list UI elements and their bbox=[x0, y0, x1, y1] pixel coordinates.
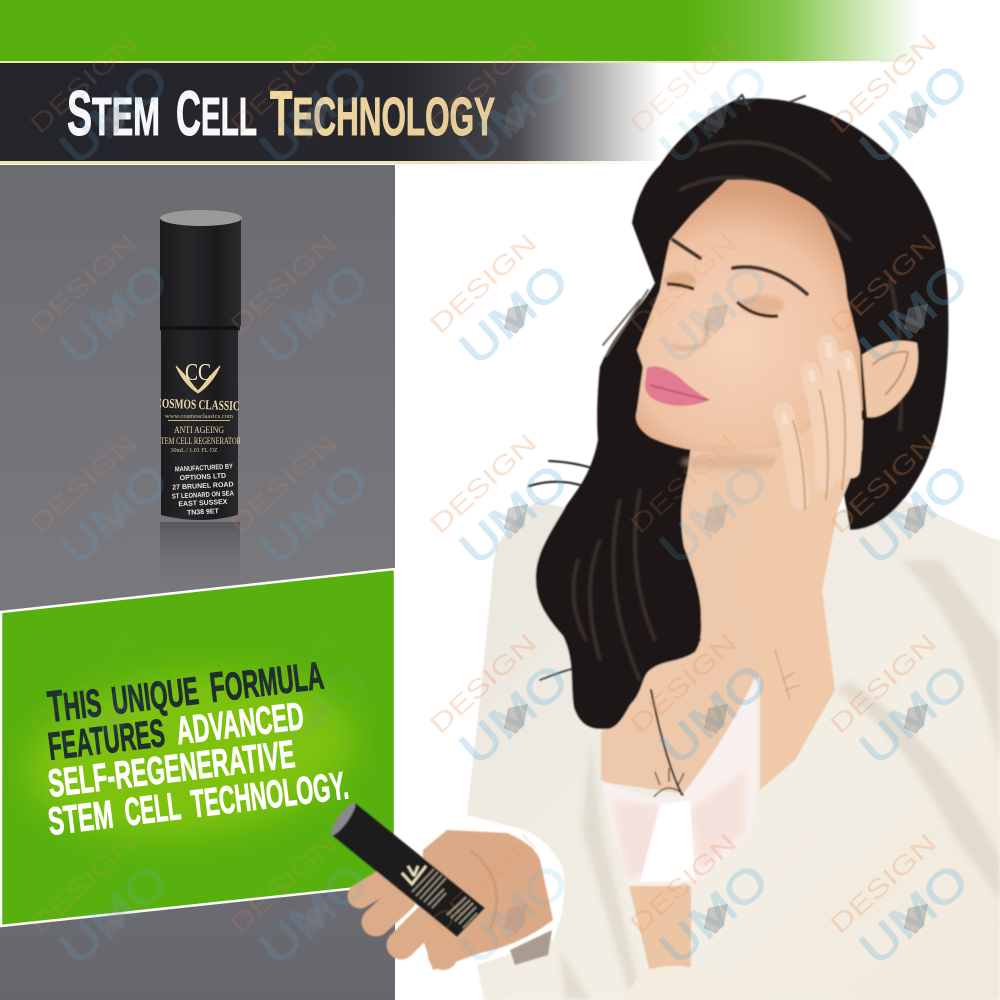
watermarks: UMO bbox=[849, 853, 978, 975]
watermarks: UMO bbox=[49, 853, 178, 975]
callout text: FORMULA bbox=[207, 651, 326, 711]
watermarks: DESIGN bbox=[424, 27, 542, 139]
watermarks: DESIGN bbox=[424, 227, 542, 339]
bottle label text: 27 BRUNEL ROAD bbox=[172, 481, 234, 492]
callout text: UNIQUE bbox=[109, 670, 201, 723]
robe lapel and tie bbox=[625, 966, 735, 1000]
watermarks: DESIGN bbox=[624, 627, 742, 739]
watermarks: UMO bbox=[649, 853, 778, 975]
title text bbox=[67, 79, 495, 149]
watermarks: UMO bbox=[49, 453, 178, 575]
white bra bbox=[601, 676, 756, 886]
face bbox=[636, 180, 863, 453]
bottle label text: MANUFACTURED BY bbox=[175, 463, 233, 474]
watermarks: DESIGN bbox=[624, 227, 742, 339]
watermarks: DESIGN bbox=[424, 627, 542, 739]
bottle label text: ANTI AGEING bbox=[174, 426, 224, 436]
watermarks: DESIGN bbox=[24, 427, 142, 539]
watermarks: UMO bbox=[649, 253, 778, 375]
callout text bbox=[45, 650, 351, 844]
watermarks: UMO bbox=[49, 653, 178, 775]
bottle label text: STEM CELL REGENERATOR bbox=[157, 437, 241, 447]
held product bottle bbox=[327, 800, 485, 937]
watermarks: DESIGN bbox=[824, 627, 942, 739]
held bottle logo bbox=[402, 866, 426, 884]
bottle label text: ST LEONARD ON SEA bbox=[172, 490, 234, 501]
product bottle upright bbox=[160, 210, 242, 558]
eyebrows bbox=[673, 240, 700, 258]
neck and chest bbox=[601, 440, 795, 795]
watermarks: DESIGN bbox=[824, 27, 942, 139]
watermarks: DESIGN bbox=[224, 27, 342, 139]
chest tattoo bbox=[654, 768, 684, 797]
watermarks: DESIGN bbox=[224, 227, 342, 339]
bottle label text: TN38 9ET bbox=[187, 508, 220, 517]
callout text: CELL bbox=[122, 785, 183, 835]
grey left panel bbox=[0, 165, 395, 1000]
watermarks: DESIGN bbox=[424, 427, 542, 539]
watermarks: UMO bbox=[449, 653, 578, 775]
watermarks: DESIGN bbox=[824, 227, 942, 339]
watermarks: DESIGN bbox=[24, 27, 142, 139]
watermarks: DESIGN bbox=[224, 627, 342, 739]
watermarks: UMO bbox=[649, 453, 778, 575]
callout text: ADVANCED bbox=[174, 695, 306, 753]
title text: CELL bbox=[176, 79, 257, 149]
callout text: THIS bbox=[45, 677, 104, 732]
callout text: SELF-REGENERATIVE bbox=[46, 733, 297, 806]
watermarks: DESIGN bbox=[824, 827, 942, 939]
raised hand bbox=[746, 343, 863, 590]
nose bbox=[672, 320, 707, 348]
green callout panel bbox=[1, 569, 395, 926]
forearm bbox=[746, 500, 836, 790]
ear bbox=[862, 341, 918, 417]
watermarks: UMO bbox=[849, 453, 978, 575]
under-chin shadow bbox=[680, 454, 790, 470]
watermarks: UMO bbox=[449, 453, 578, 575]
lips bbox=[645, 366, 710, 406]
watermarks: UMO bbox=[649, 653, 778, 775]
watermarks: UMO bbox=[449, 253, 578, 375]
watermarks: UMO bbox=[249, 853, 378, 975]
bottle label text: www.cosmosclassics.com bbox=[165, 414, 233, 420]
bottle logo bbox=[176, 360, 220, 393]
callout text: TECHNOLOGY. bbox=[189, 764, 351, 826]
watermarks: DESIGN bbox=[224, 827, 342, 939]
watermarks: UMO bbox=[449, 853, 578, 975]
title banner bbox=[0, 61, 880, 164]
watermarks: UMO bbox=[249, 653, 378, 775]
top green band bbox=[0, 0, 1000, 62]
eyes bbox=[664, 272, 696, 288]
watermarks: DESIGN bbox=[824, 427, 942, 539]
watermarks: UMO bbox=[49, 53, 178, 175]
watermarks: DESIGN bbox=[624, 827, 742, 939]
watermarks: UMO bbox=[49, 253, 178, 375]
watermarks: UMO bbox=[849, 253, 978, 375]
bottle label text bbox=[160, 398, 240, 515]
watermarks: DESIGN bbox=[224, 427, 342, 539]
woman portrait bbox=[467, 95, 1000, 1000]
title text: STEM bbox=[67, 79, 160, 149]
watermarks: UMO bbox=[849, 53, 978, 175]
watermarks: UMO bbox=[249, 53, 378, 175]
watermarks: UMO bbox=[649, 53, 778, 175]
watermarks: DESIGN bbox=[624, 27, 742, 139]
back hair bbox=[536, 98, 948, 729]
watermarks: UMO bbox=[449, 53, 578, 175]
held bottle label lines bbox=[412, 869, 477, 928]
title text: TECHNOLOGY bbox=[270, 79, 495, 149]
callout text: STEM bbox=[46, 793, 116, 844]
callout text: FEATURES bbox=[46, 712, 167, 769]
bottle label text: 30mL / 1.01 FL OZ bbox=[170, 448, 218, 454]
bottle logo: CC bbox=[185, 360, 211, 386]
watermarks: DESIGN bbox=[24, 227, 142, 339]
watermarks: UMO bbox=[249, 253, 378, 375]
hair strands bbox=[529, 95, 901, 795]
watermarks: DESIGN bbox=[24, 827, 142, 939]
holding hand bbox=[327, 800, 553, 970]
lower chest skin bbox=[629, 886, 691, 972]
watermarks: DESIGN bbox=[424, 827, 542, 939]
bottle label text: EAST SUSSEX bbox=[178, 499, 228, 508]
bottle label text: COSMOS CLASSICS bbox=[155, 395, 245, 414]
bottle label text: OPTIONS LTD bbox=[179, 473, 226, 482]
watermarks: DESIGN bbox=[624, 427, 742, 539]
robe bbox=[467, 490, 1000, 1000]
robe shading bbox=[560, 560, 1000, 1000]
watermarks: UMO bbox=[249, 453, 378, 575]
watermarks: UMO bbox=[849, 653, 978, 775]
watermarks: DESIGN bbox=[24, 627, 142, 739]
